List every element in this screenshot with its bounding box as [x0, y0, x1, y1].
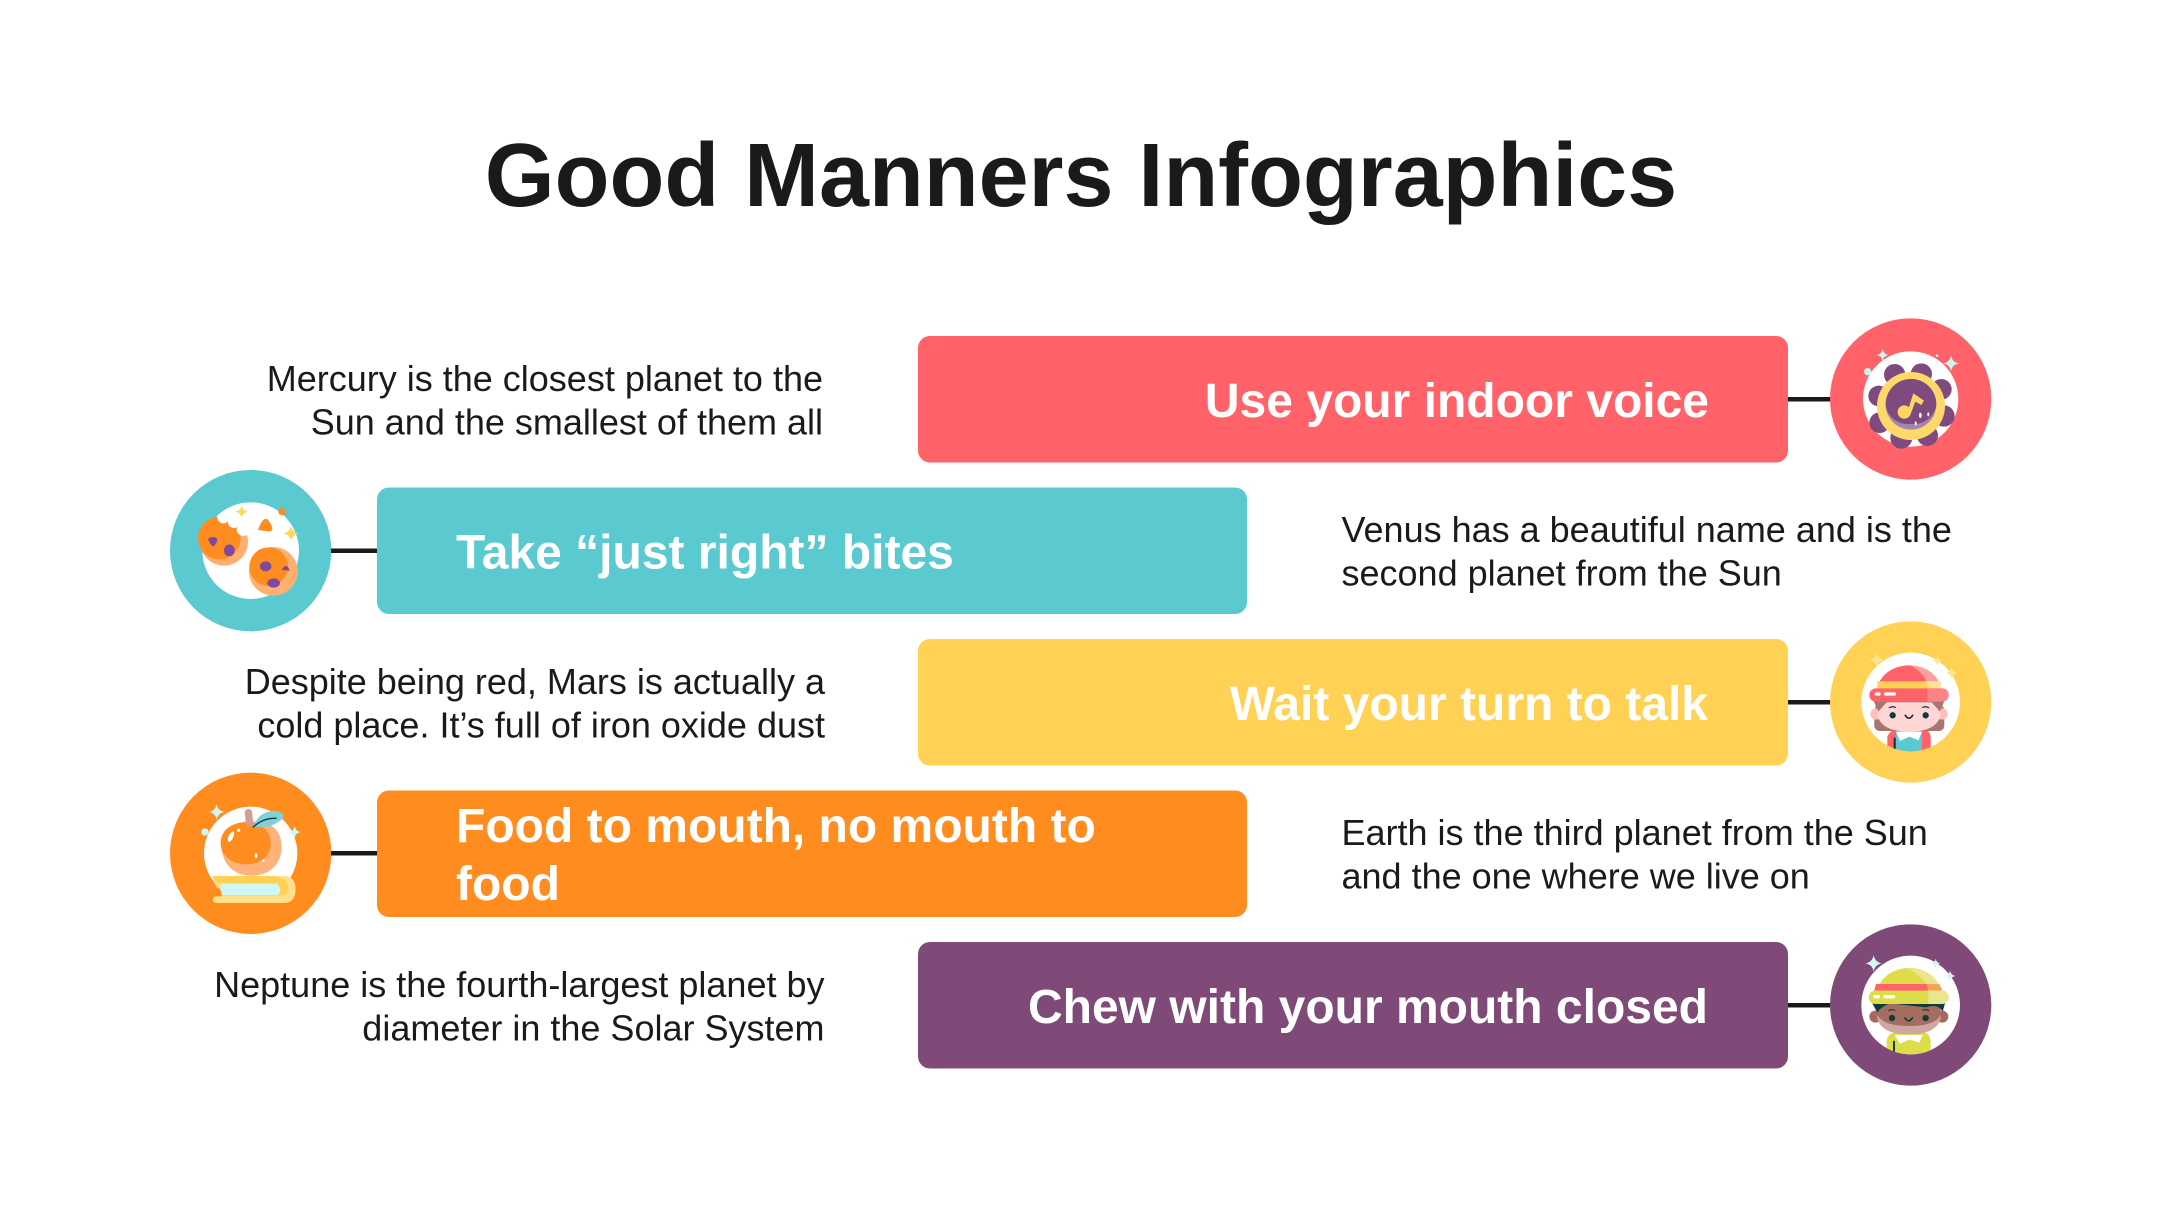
title: Good Manners Infographics — [485, 126, 1677, 226]
bar label: Take “just right” bites — [456, 526, 954, 580]
icon: apple on books — [170, 773, 331, 934]
bar: wait your turn to talk — [918, 639, 1788, 766]
bar label: Chew with your mouth closed — [1028, 981, 1708, 1034]
bar: use your indoor voice — [918, 336, 1788, 462]
panel: food to mouth — [170, 773, 1928, 934]
connector — [331, 851, 378, 856]
panel: wait your turn to talk — [245, 621, 1991, 783]
description: Neptune: Neptune is the fourth-largest planet by — [214, 964, 824, 1005]
description: Venus: Venus has a beautiful name and is the — [1342, 509, 1952, 550]
connector — [331, 548, 378, 553]
description: Earth: and the one where we live on — [1342, 855, 1810, 896]
description: Neptune: diameter in the Solar System — [362, 1007, 824, 1048]
panel: use your indoor voice — [267, 318, 1991, 480]
bar: take just right bites — [377, 488, 1247, 614]
bar label: Use your indoor voice — [1205, 375, 1709, 428]
connector — [1788, 1003, 1831, 1008]
bar label: Wait your turn to talk — [1230, 678, 1708, 731]
description: Mars: Despite being red, Mars is actually a — [245, 661, 826, 702]
description: Earth: Earth is the third planet from the Sun — [1342, 812, 1928, 853]
icon: cookies — [170, 470, 331, 631]
panel: chew with your mouth closed — [214, 924, 1991, 1086]
bar label: Food to mouth, no mouth to — [456, 800, 1096, 853]
icon: boy with yellow hat — [1830, 924, 1991, 1086]
description: Mercury: Mercury is the closest planet to the — [267, 358, 823, 399]
connector — [1788, 700, 1831, 704]
description: Venus: second planet from the Sun — [1342, 552, 1782, 593]
description: Mars: cold place. It’s full of iron oxide dust — [257, 704, 825, 745]
description: Mercury: Sun and the smallest of them all — [311, 401, 823, 442]
icon: girl with red hat — [1830, 621, 1991, 783]
bar: chew with your mouth closed — [918, 942, 1788, 1068]
panel: take just right bites — [170, 470, 1952, 631]
icon: music record — [1830, 318, 1991, 480]
bar: food to mouth — [377, 790, 1247, 917]
bar label: food — [456, 858, 560, 911]
connector — [1788, 397, 1831, 402]
